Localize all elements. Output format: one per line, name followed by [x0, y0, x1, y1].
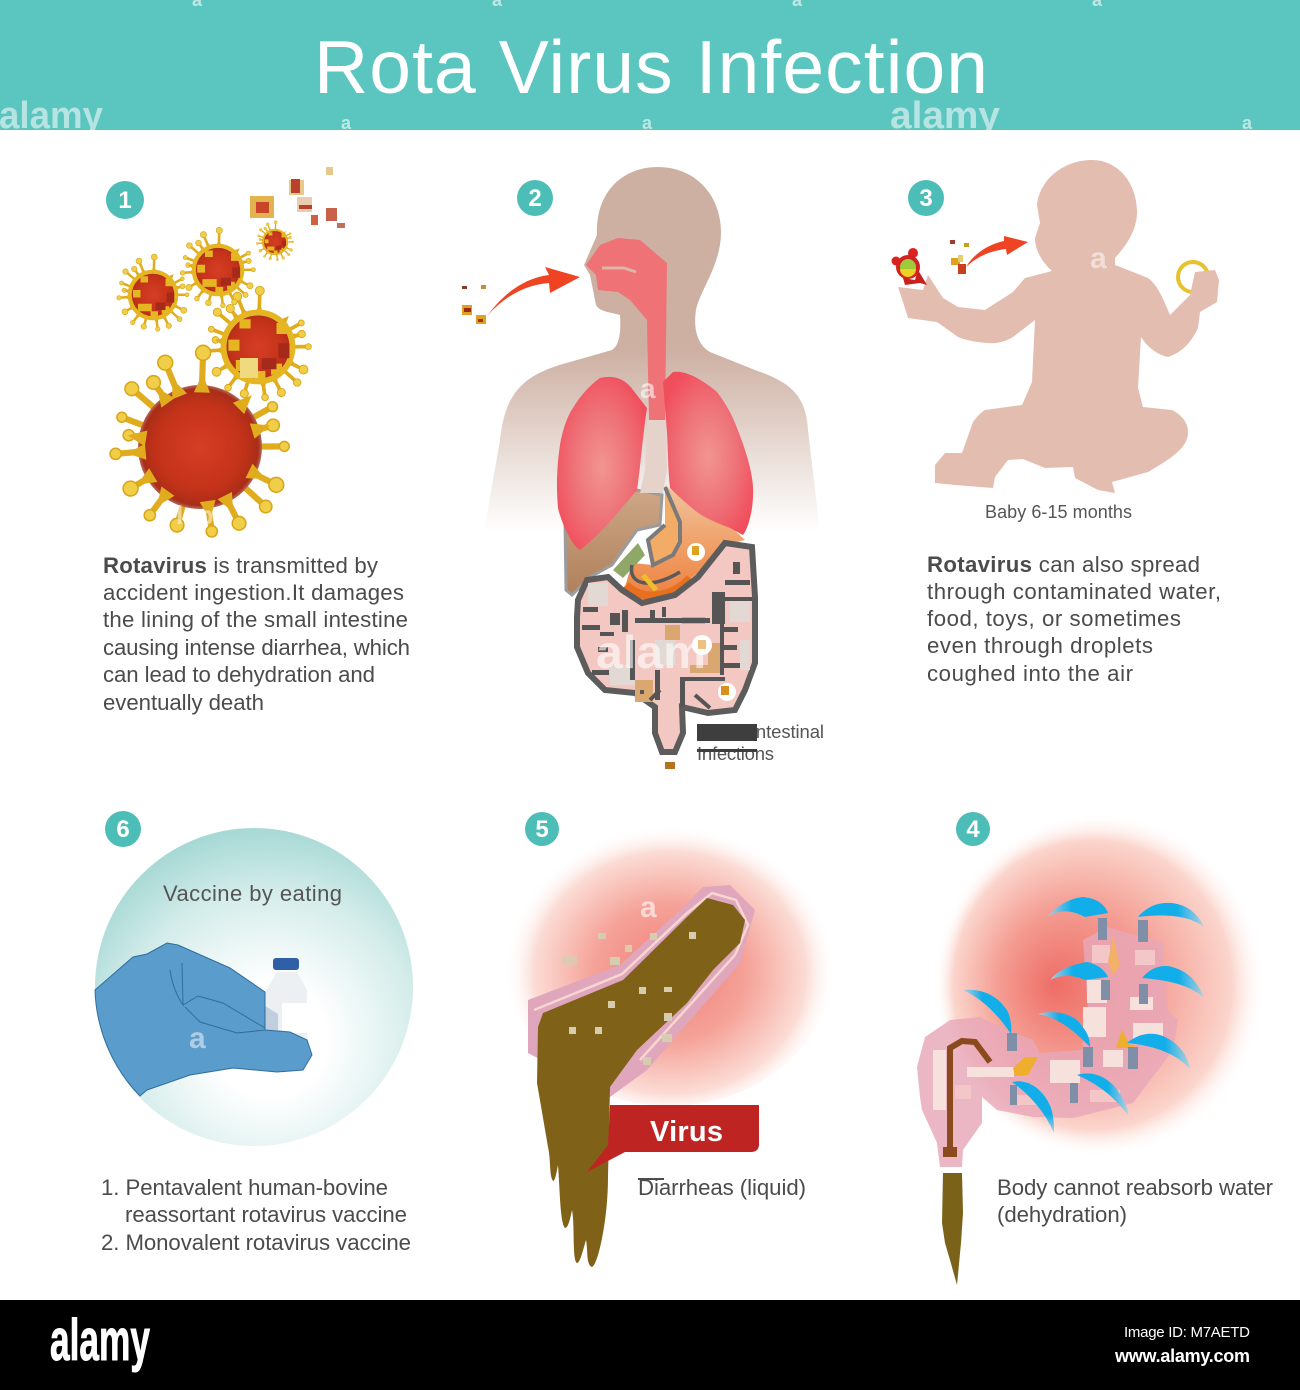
vaccine circle: [95, 828, 413, 1146]
caption: age: Baby 6-15 months: [985, 502, 1132, 522]
description text: the lining of the small intestine: [103, 607, 408, 632]
small watermarks: a: [1242, 113, 1253, 133]
rattle toy: [892, 248, 927, 285]
watermark on baby: a: [1090, 242, 1107, 275]
watermark on glove: a: [189, 1022, 206, 1055]
vaccine list: reassortant rotavirus vaccine: [125, 1202, 407, 1227]
panel 6: vaccine: [95, 811, 413, 1255]
intestine: [917, 927, 1178, 1167]
virus particles near mouth: [462, 285, 486, 324]
inflammation halo: [934, 813, 1266, 1157]
mouth and esophagus: [586, 238, 667, 420]
stomach and pancreas: [613, 485, 745, 602]
panel 1: virus: [103, 167, 410, 715]
description text: can lead to dehydration and: [103, 662, 375, 687]
water arrows: [963, 897, 1204, 1133]
image id: Image ID: M7AETD: [1124, 1324, 1250, 1341]
badge 2: [517, 180, 553, 216]
vial: [265, 958, 307, 1040]
label: gastrointestinal infections: Infections: [697, 743, 774, 764]
badge 6: 6: [116, 816, 130, 843]
panel 3: baby: [892, 160, 1221, 686]
badge 3: [908, 180, 944, 216]
caption: diarrheas: Diarrheas (liquid): [638, 1175, 806, 1200]
watermark on virus: lap: [176, 500, 214, 530]
watermark on lungs: a: [640, 373, 656, 404]
intestine wall: [528, 885, 755, 1097]
brown tube: [943, 1041, 990, 1157]
label: virus: [587, 1105, 759, 1172]
description text: accident ingestion.It damages: [103, 580, 404, 605]
description text: Rotavirus can also spread: [927, 552, 1200, 577]
panel 5: diarrhea: [504, 810, 836, 1267]
header watermark left: alamy: [0, 95, 103, 137]
footer bar: [0, 1300, 1300, 1390]
badge 6: [105, 811, 141, 847]
badge 5: [525, 812, 559, 846]
description text: causing intense diarrhea, which: [103, 635, 410, 660]
badge 1: 1: [118, 187, 132, 214]
title: Rota Virus Infection: [314, 25, 988, 109]
panel 4: dehydration: [917, 812, 1274, 1285]
vaccine list: [101, 1175, 411, 1255]
label: gastrointestinal infections: Gastrointestinal: [697, 721, 824, 742]
drip: [942, 1173, 963, 1285]
watery stool: [537, 898, 745, 1267]
description text: [927, 552, 1221, 686]
panel 2: digestive tract: [462, 167, 824, 769]
footer logo: alamy: [50, 1308, 150, 1373]
badge 2: 2: [528, 185, 542, 212]
grey water stubs: [1007, 918, 1148, 1105]
watermark on halo: a: [640, 891, 657, 924]
caption: dehydration: [997, 1175, 1274, 1227]
vaccine list: 1. Pentavalent human-bovine: [101, 1175, 388, 1200]
badge 4: 4: [966, 816, 980, 843]
circle caption: Vaccine by eating: [163, 881, 342, 906]
orange flecks: [1013, 935, 1140, 1076]
liver: [565, 490, 662, 595]
watermark on intestine: alam: [596, 626, 706, 678]
description text: [103, 553, 410, 715]
badge 3: 3: [919, 185, 933, 212]
caption: dehydration: Body cannot reabsorb water: [997, 1175, 1274, 1200]
header banner: [0, 0, 1300, 137]
intestines: [577, 543, 755, 769]
label: virus: Virus: [650, 1116, 723, 1148]
inflammation halo: [504, 810, 836, 1106]
virus particles near toy: [950, 240, 969, 274]
header watermark right: alamy: [890, 95, 1000, 137]
body silhouette: [484, 167, 820, 532]
small watermarks: [192, 0, 1253, 133]
small watermarks: a: [341, 113, 352, 133]
description text: coughed into the air: [927, 661, 1134, 686]
vaccine list: 2. Monovalent rotavirus vaccine: [101, 1230, 411, 1255]
description text: even through droplets: [927, 633, 1153, 658]
illustration: rotavirus particles: [110, 167, 345, 537]
description text: food, toys, or sometimes: [927, 606, 1181, 631]
yellow ring toy: [1178, 262, 1208, 292]
caption: dehydration: (dehydration): [997, 1202, 1127, 1227]
arrow: [966, 236, 1028, 267]
gloved hand: [95, 943, 312, 1096]
label: gastrointestinal infections: [697, 721, 824, 764]
website: www.alamy.com: [1114, 1346, 1250, 1366]
description text: Rotavirus is transmitted by: [103, 553, 379, 578]
small watermarks: a: [642, 113, 653, 133]
lungs: [557, 372, 753, 550]
badge 1: [106, 181, 144, 219]
badge 5: 5: [535, 816, 549, 843]
virus flecks: [562, 932, 696, 1065]
badge 4: [956, 812, 990, 846]
baby silhouette: [898, 160, 1219, 493]
description text: eventually death: [103, 690, 264, 715]
arrow into mouth: [487, 267, 580, 316]
description text: through contaminated water,: [927, 579, 1221, 604]
